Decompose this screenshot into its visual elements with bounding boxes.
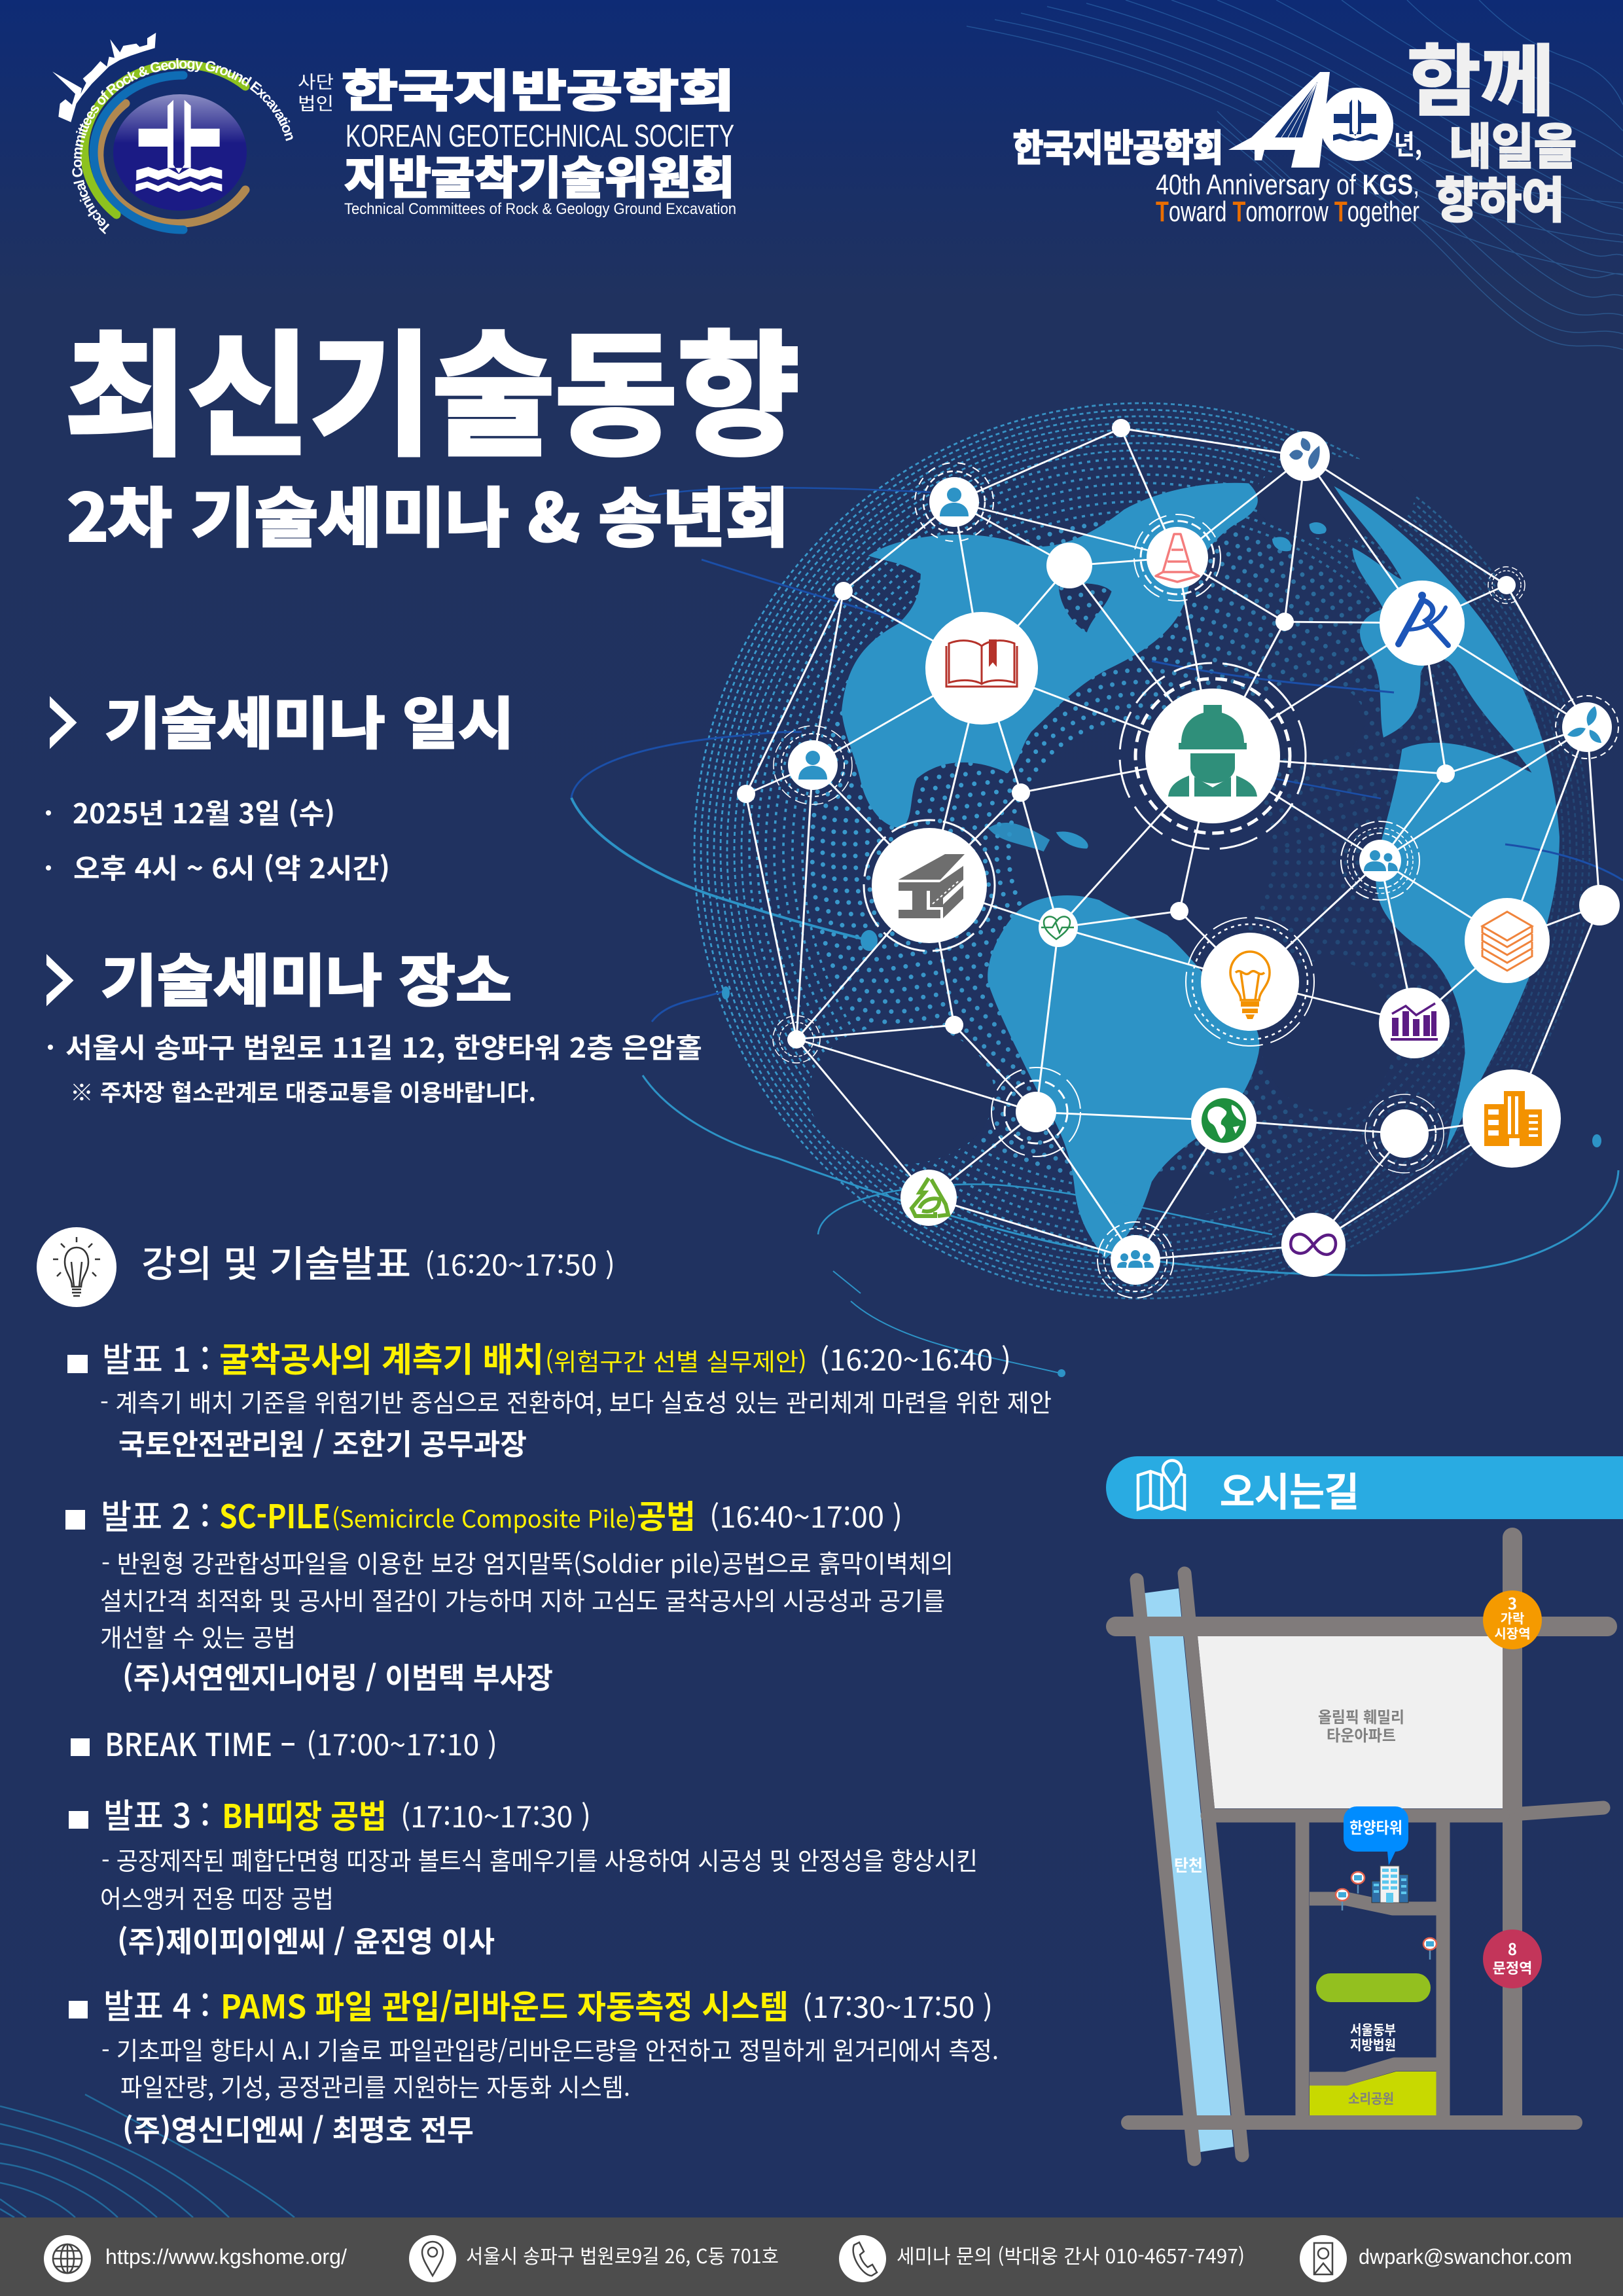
heading block: 강의 및 기술발표 <box>141 1235 411 1288</box>
small network nodes <box>737 419 1620 1158</box>
section: seminar date: 오후 4시 ~ 6시 (약 2시간) <box>73 847 390 887</box>
emblem skyline <box>52 33 156 122</box>
station: munjeong: 8 <box>1508 1937 1517 1960</box>
river <box>1145 1588 1234 2152</box>
icon: idea bulb <box>37 1227 116 1307</box>
presentation 1: - 계측기 배치 기준을 위험기반 중심으로 전환하여, 보다 실효성 있는 관리체계 마련을 위한 제안 <box>100 1383 1052 1419</box>
apartment block <box>1198 1636 1503 1808</box>
time <box>46 865 51 870</box>
presentation 4: (17:30~17:50 ) <box>802 1984 993 2026</box>
directions banner <box>1106 1456 1623 1519</box>
panel: directions <box>1106 1456 1623 2159</box>
presentation 3: BH띠장 공법 <box>222 1791 387 1838</box>
section: seminar venue <box>47 935 702 1108</box>
map: 탄천 <box>1174 1853 1203 1876</box>
icon: tower building <box>1372 1866 1408 1903</box>
header: organisation name: 법인 <box>298 90 334 115</box>
network connection lines <box>746 428 1599 1260</box>
map <box>1116 1537 1607 2159</box>
year suffix: 년, <box>1394 123 1422 163</box>
station: garak market <box>1483 1590 1542 1649</box>
station: garak market: 시장역 <box>1494 1623 1531 1642</box>
map: 소리공원 <box>1348 2089 1394 2108</box>
corporation tag: 사단 <box>298 68 334 94</box>
arrow <box>47 956 73 1005</box>
english tagline: 40th Anniversary of KGS, <box>1156 169 1419 201</box>
section: seminar date <box>46 678 514 887</box>
station: garak market: 가락 <box>1501 1608 1524 1627</box>
presentation 2: 개선할 수 있는 공법 <box>100 1618 296 1654</box>
presentation 3: 어스앵커 전용 띠장 공법 <box>100 1879 334 1915</box>
station: garak market: 3 <box>1508 1591 1517 1614</box>
map: 지방법원 <box>1350 2035 1396 2054</box>
map: 타운아파트 <box>1327 1723 1396 1746</box>
continents <box>809 457 1560 1259</box>
decorative top-right wave lines <box>967 0 1623 350</box>
footer: phone inquiry: 세미나 문의 (박대웅 간사 010-4657-7497) <box>897 2240 1245 2269</box>
icon: bar chart <box>1379 988 1450 1058</box>
section: lectures and presentations <box>37 1227 1052 2149</box>
presentation 1: 굴착공사의 계측기 배치 <box>219 1333 544 1382</box>
emblem cross and water <box>135 100 222 192</box>
presentation 2: 설치간격 최적화 및 공사비 절감이 가능하며 지하 고심도 굴착공사의 시공성과 공기를 <box>100 1581 945 1617</box>
globe dotted rings <box>694 403 1590 1299</box>
presentation 3: - 공장제작된 폐합단면형 띠장과 볼트식 홈메우기를 사용하여 시공성 및 안정성을 향상시킨 <box>101 1841 978 1877</box>
footer: website: https://www.kgshome.org/ <box>105 2245 347 2269</box>
icon: open book <box>925 612 1038 725</box>
society name: 한국지반공학회 <box>342 55 735 120</box>
directions banner: 오시는길 <box>1220 1461 1359 1518</box>
presentation 4: - 기초파일 항타시 A.I 기술로 파일관입량/리바운드량을 안전하고 정밀하게 원거리에서 측정. <box>101 2031 999 2067</box>
heading block: (16:20~17:50 ) <box>425 1242 615 1284</box>
icon: map with pin <box>1138 1460 1185 1509</box>
address <box>48 1045 53 1050</box>
decorative bottom-left wave lines <box>0 2094 294 2217</box>
society name small: 한국지반공학회 <box>1013 119 1223 172</box>
presentation 3: (17:10~17:30 ) <box>401 1794 591 1836</box>
numeral 4 with bridge <box>1228 72 1330 168</box>
break time: BREAK TIME – <box>105 1719 296 1765</box>
break time <box>71 1719 497 1765</box>
presentation 1: (16:20~16:40 ) <box>819 1337 1011 1379</box>
presentation 3: 발표 3 : <box>103 1789 210 1838</box>
icon: person <box>929 477 979 527</box>
presentation 4: 파일잔량, 기성, 공정관리를 지원하는 자동화 시스템. <box>120 2068 630 2104</box>
header: 40th anniversary <box>1013 19 1577 232</box>
icon: infinity loop <box>1281 1213 1346 1277</box>
presentation 2: SC-PILE <box>219 1491 330 1538</box>
presentation 2: 발표 2 : <box>101 1490 210 1539</box>
icon: recycle leaf <box>901 1170 957 1226</box>
footer: email <box>1300 2235 1572 2282</box>
committee name: 지반굴착기술위원회 <box>344 142 735 207</box>
header: organisation name <box>298 55 736 218</box>
header: organisation name: KOREAN GEOTECHNICAL SOCIETY <box>346 119 734 154</box>
presentation 4: (주)영신디엔씨 / 최평호 전무 <box>122 2107 474 2149</box>
presentation 2: (Semicircle Composite Pile) <box>332 1499 637 1535</box>
section: seminar venue: 서울시 송파구 법원로 11길 12, 한양타워 2층 은암홀 <box>65 1026 702 1066</box>
icon: leaf propeller <box>1562 702 1612 752</box>
icon: light bulb <box>1201 933 1299 1031</box>
icon: construction worker <box>1145 689 1280 823</box>
station: munjeong: 문정역 <box>1493 1957 1532 1978</box>
station: munjeong <box>1483 1929 1542 1988</box>
footer: phone inquiry <box>839 2235 1245 2282</box>
header: 40th anniversary: Toward Tomorrow Together <box>1156 196 1419 228</box>
icon: stacked layers <box>1465 898 1550 983</box>
icon: earth globe <box>1191 1088 1257 1153</box>
presentation 1 <box>67 1333 1052 1463</box>
icon: two persons <box>1359 840 1401 882</box>
icon: heart pulse <box>1039 908 1078 947</box>
presentation 3: (주)제이피이엔씨 / 윤진영 이사 <box>117 1918 495 1960</box>
presentation 2: 공법 <box>637 1491 696 1538</box>
icon: nature trefoil <box>1280 431 1330 481</box>
panel: network globe <box>571 403 1623 1377</box>
subtitle: 2차 기술세미나 & 송년회 <box>67 467 789 560</box>
arrow <box>50 698 76 747</box>
icon: steel beam <box>872 828 987 943</box>
date <box>46 810 51 816</box>
heading: 기술세미나 일시 <box>105 678 514 760</box>
heading: 기술세미나 장소 <box>101 935 512 1017</box>
presentation 4: 발표 4 : <box>103 1979 210 2028</box>
presentation 2 <box>65 1490 954 1696</box>
logo: rock and geology committee emblem <box>52 33 293 234</box>
green strip <box>1316 1973 1431 2002</box>
footer: address: 서울시 송파구 법원로9길 26, C동 701호 <box>466 2240 779 2269</box>
dashed node rings <box>773 463 1618 1298</box>
heading block <box>37 1227 615 1307</box>
icon: office building <box>1463 1069 1561 1168</box>
presentation 4 <box>69 1979 999 2149</box>
section: seminar date: 2025년 12월 3일 (수) <box>73 792 335 832</box>
emblem arcs <box>84 64 245 230</box>
callout: hanyang tower <box>1344 1806 1408 1865</box>
map: 서울동부 <box>1350 2020 1396 2039</box>
numeral 0 emblem <box>1320 88 1393 161</box>
header: 40th anniversary: 향하여 <box>1435 162 1565 232</box>
presentation 2: - 반원형 강관합성파일을 이용한 보강 엄지말뚝(Soldier pile)공법으로 흙막이벽체의 <box>101 1544 954 1580</box>
icon: person 2 <box>788 740 838 790</box>
presentation 2: (16:40~17:00 ) <box>709 1494 902 1536</box>
footer <box>0 2217 1623 2296</box>
presentation 3 <box>69 1789 978 1960</box>
icon: team of three <box>1111 1235 1160 1285</box>
title: 최신기술동향 <box>65 288 800 482</box>
sori park <box>1310 2072 1436 2115</box>
presentation 1: 발표 1 : <box>102 1333 210 1382</box>
footer: website <box>44 2235 347 2282</box>
icon: compass drafting tool <box>1380 581 1465 666</box>
footer: address <box>409 2235 779 2282</box>
header: organisation name: Technical Committees of Rock & Geology Ground Excavation <box>344 200 736 218</box>
icon: bus stops <box>1336 1872 1436 1960</box>
parking note: ※ 주차장 협소관계로 대중교통을 이용바랍니다. <box>70 1075 536 1108</box>
break time: (17:00~17:10 ) <box>306 1722 497 1764</box>
presentation 1: 국토안전관리원 / 조한기 공무과장 <box>118 1421 527 1463</box>
callout: hanyang tower: 한양타워 <box>1349 1815 1402 1838</box>
orbit lines <box>571 488 1623 1377</box>
emblem circular text: Technical Committees of Rock & Geology Ground Excavation <box>72 58 293 234</box>
emblem circle <box>113 94 247 211</box>
presentation 1: (위험구간 선별 실무제안) <box>545 1342 807 1378</box>
header: 40th anniversary: 내일을 <box>1449 108 1577 178</box>
presentation 2: (주)서연엔지니어링 / 이범택 부사장 <box>122 1655 553 1696</box>
slogan: 함께 <box>1407 19 1554 131</box>
map labels: 올림픽 훼밀리 <box>1318 1704 1404 1727</box>
roads <box>1116 1537 1607 2159</box>
footer: email: dwpark@swanchor.com <box>1359 2245 1572 2269</box>
presentation 4: PAMS 파일 관입/리바운드 자동측정 시스템 <box>221 1981 789 2028</box>
icon: traffic cone <box>1147 527 1208 588</box>
